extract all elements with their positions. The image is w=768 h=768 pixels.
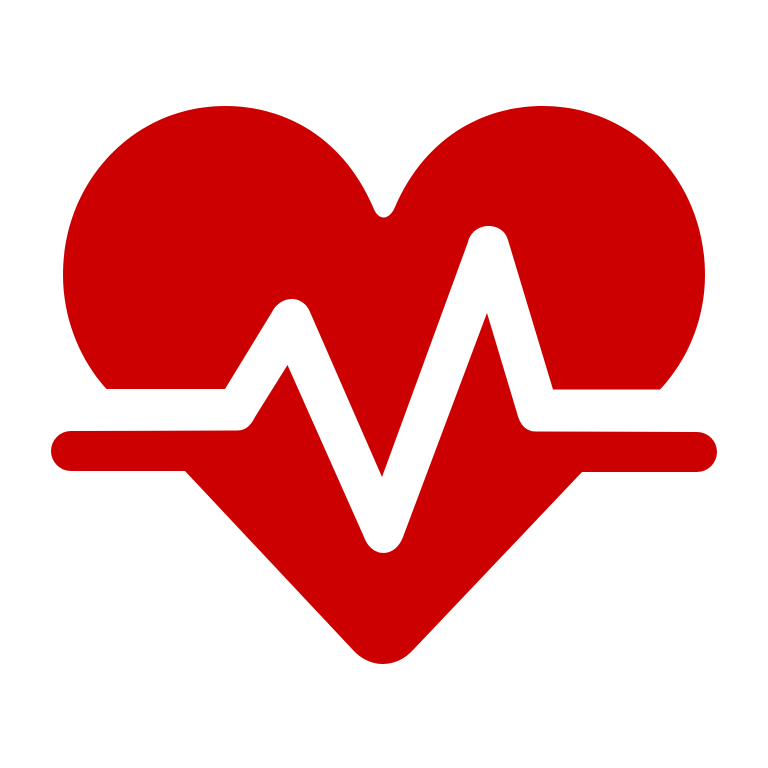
heart lower body and pulse line: [51, 313, 717, 664]
icon: heart with pulse line: [51, 106, 717, 664]
heart upper lobes: [63, 106, 705, 477]
